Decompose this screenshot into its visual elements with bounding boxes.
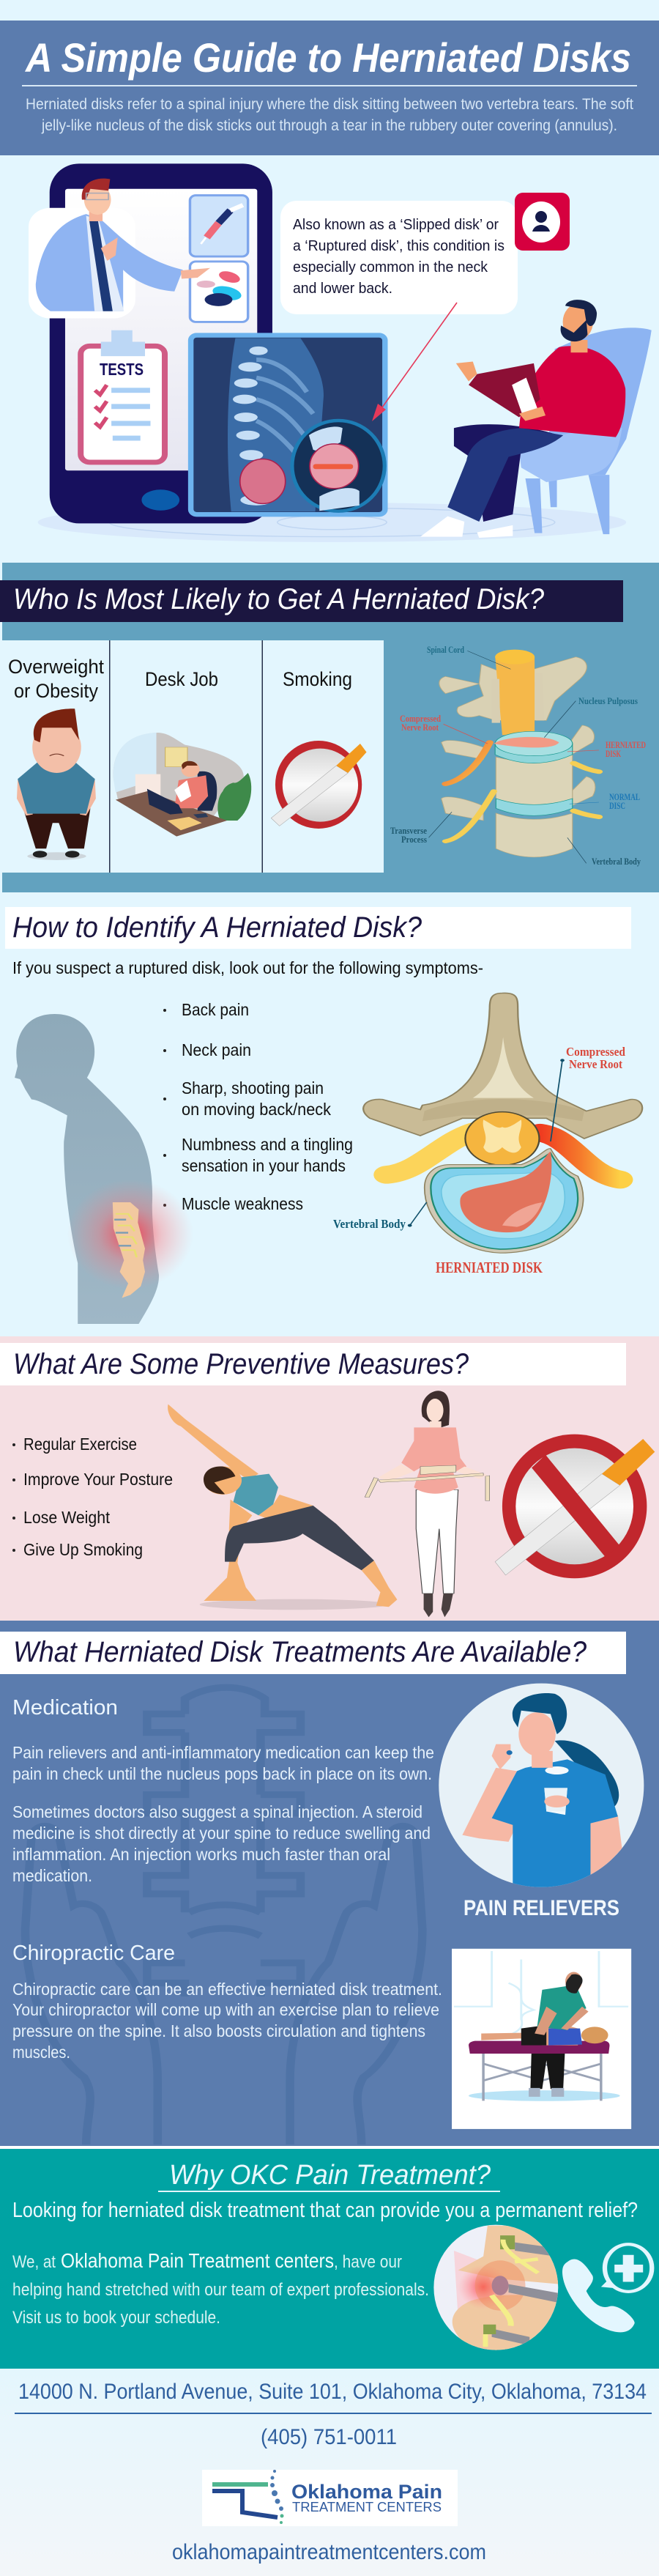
callout: especially common in the neck — [293, 259, 488, 275]
label: overweight: Overweight — [8, 656, 104, 678]
heading: Why OKC Pain Treatment? — [169, 2160, 491, 2191]
medication text: inflammation. An injection works much faster than oral — [12, 1845, 390, 1864]
diagram: herniated disk cross-section — [363, 993, 642, 1253]
chiropractic text: pressure on the spine. It also boosts circulation and tightens — [12, 2021, 425, 2040]
symptoms list — [163, 1000, 353, 1213]
anatomy labels: Compressed — [400, 713, 442, 724]
panel: risk factors — [0, 640, 384, 873]
intro text: jelly-like nucleus of the disk sticks out through a tear in the rubbery outer covering (annulus). — [41, 117, 617, 134]
anatomy labels: Vertebral Body — [592, 856, 641, 867]
trousers — [454, 424, 559, 522]
body text: , have our — [334, 2252, 402, 2272]
section: how to identify — [4, 892, 654, 1325]
measures list — [12, 1435, 173, 1559]
icon: phone with medical cross — [562, 2244, 652, 2332]
anatomy labels: Process — [401, 834, 427, 845]
leader lines — [551, 1060, 562, 1141]
doctor — [29, 179, 210, 319]
callout: a ‘Ruptured disk’, this condition is — [293, 238, 505, 254]
nucleus — [460, 1152, 551, 1232]
anatomy labels — [390, 644, 646, 867]
measures list: Lose Weight — [23, 1508, 111, 1527]
symptoms list: Numbness and a tingling — [182, 1135, 353, 1154]
tests label: TESTS — [100, 360, 144, 379]
header band — [0, 21, 659, 155]
watermark: spine and hands — [25, 1687, 422, 2144]
disk labels: Nerve Root — [569, 1057, 622, 1071]
label: overweight: or Obesity — [14, 680, 98, 702]
heading: What Are Some Preventive Measures? — [13, 1348, 469, 1380]
torso — [519, 346, 625, 437]
medication text: Sometimes doctors also suggest a spinal injection. A steroid — [12, 1802, 422, 1821]
nerve roots — [387, 1131, 475, 1174]
label: desk job: Desk Job — [145, 668, 218, 690]
vertebral bodies — [496, 755, 573, 807]
disk labels: Vertebral Body — [333, 1217, 406, 1231]
leader lines — [428, 651, 599, 863]
disk labels — [333, 1045, 625, 1276]
logo: Oklahoma Pain — [291, 2481, 442, 2503]
callout: Also known as a ‘Slipped disk’ or — [293, 217, 499, 233]
section 5 illustrations — [439, 1684, 644, 2129]
medication text: pain in check until the nucleus pops back in place on its own. — [12, 1764, 432, 1783]
body text: helping hand stretched with our team of expert professionals. — [12, 2280, 429, 2300]
icon: woman measuring waist — [365, 1391, 490, 1617]
section 6 illustrations — [433, 2225, 652, 2351]
herniated and normal discs — [495, 744, 573, 763]
anatomy labels: Transverse — [390, 825, 427, 836]
logo — [202, 2470, 458, 2526]
symptoms list: sensation in your hands — [182, 1156, 346, 1175]
intro text — [26, 96, 633, 134]
chiropractic text: Chiropractic care can be an effective herniated disk treatment. — [12, 1980, 442, 1999]
disc — [425, 1149, 584, 1253]
anatomy labels: Spinal Cord — [427, 644, 465, 655]
vertebra — [363, 993, 642, 1139]
treatments content — [0, 1632, 626, 2062]
symptoms list: Muscle weakness — [182, 1194, 303, 1213]
pain relievers caption: PAIN RELIEVERS — [463, 1896, 619, 1920]
callout: and lower back. — [293, 281, 392, 297]
x-ray — [191, 336, 385, 514]
body text — [12, 2249, 429, 2328]
section: preventive measures — [0, 1336, 659, 1621]
heading: What Herniated Disk Treatments Are Available? — [13, 1636, 587, 1668]
measures list: Give Up Smoking — [23, 1540, 143, 1559]
silhouette with spine — [15, 1014, 193, 1324]
medication heading: Medication — [12, 1696, 118, 1720]
body text: Oklahoma Pain Treatment centers — [61, 2249, 334, 2272]
card: pills — [190, 262, 248, 322]
symptoms list: Sharp, shooting pain — [182, 1078, 324, 1098]
anatomy labels: DISK — [606, 748, 622, 759]
disk labels: Compressed — [566, 1045, 625, 1059]
nerve roots — [445, 742, 599, 841]
chair — [519, 327, 652, 534]
chiropractic heading: Chiropractic Care — [12, 1942, 175, 1965]
anatomy labels: NORMAL — [609, 791, 640, 802]
anatomy labels: Nerve Root — [401, 722, 439, 733]
page background — [0, 0, 659, 564]
icon: no smoking sign — [495, 1435, 655, 1578]
head — [570, 340, 587, 352]
section 4 illustrations — [168, 1391, 655, 1617]
anatomy labels: Nucleus Pulposus — [578, 695, 638, 706]
chiropractic text: Your chiropractor will come up with an exercise plan to relieve — [12, 2000, 439, 2019]
illustration: woman taking a pill — [439, 1684, 644, 1889]
medication text: medication. — [12, 1866, 92, 1885]
icon: yoga pose — [168, 1404, 397, 1610]
icon: person badge — [515, 193, 570, 251]
phone — [50, 163, 272, 523]
card: syringe — [190, 196, 248, 256]
body text: Visit us to book your schedule. — [12, 2308, 220, 2328]
chiropractic text: muscles. — [12, 2043, 70, 2062]
icon: desk job — [113, 733, 251, 837]
logo: TREATMENT CENTERS — [292, 2500, 442, 2514]
symptoms list: on moving back/neck — [182, 1100, 331, 1119]
chiropractic text — [12, 1980, 442, 2062]
arrow — [372, 303, 457, 421]
floor rug — [38, 503, 626, 542]
medication text: Pain relievers and anti-inflammatory medication can keep the — [12, 1743, 434, 1762]
footer — [0, 2369, 659, 2576]
intro line: If you suspect a ruptured disk, look out for the following symptoms- — [12, 958, 483, 977]
anatomy diagram: spine segment — [428, 650, 599, 863]
card: chiropractic illustration — [452, 1949, 631, 2129]
patient in armchair — [420, 300, 652, 538]
section 2 illustrations — [17, 650, 599, 863]
icon: no smoking ring — [271, 741, 367, 829]
heading: Who Is Most Likely to Get A Herniated Disk? — [13, 583, 545, 615]
spinal cord — [495, 656, 535, 735]
illustration: phone, doctor, x-ray and patient — [29, 163, 652, 542]
label: overweight — [8, 656, 104, 702]
symptoms list: Back pain — [182, 1000, 249, 1019]
clipboard: tests — [81, 330, 165, 462]
section 3 illustrations — [15, 993, 642, 1324]
measures list: Regular Exercise — [23, 1435, 137, 1454]
medication text — [12, 1743, 434, 1885]
heading — [5, 907, 631, 949]
handset — [512, 378, 538, 418]
body text: We, at — [12, 2252, 56, 2272]
label: smoking: Smoking — [283, 668, 352, 690]
heading: How to Identify A Herniated Disk? — [12, 911, 422, 944]
section: treatments — [0, 1621, 659, 2146]
anatomy labels: DISC — [609, 800, 625, 811]
disk labels: HERNIATED DISK — [436, 1259, 543, 1276]
medication text: medicine is shot directly at your spine to reduce swelling and — [12, 1824, 431, 1843]
heading — [0, 1343, 626, 1385]
section: why OKC — [0, 2146, 659, 2369]
phone number: (405) 751-0011 — [261, 2425, 397, 2449]
icon: overweight man — [17, 708, 96, 860]
spinal cord — [465, 1112, 539, 1165]
section: who is most likely — [0, 563, 659, 892]
callout — [280, 201, 518, 314]
transverse processes — [439, 657, 595, 821]
measures list: Improve Your Posture — [23, 1470, 173, 1489]
website: oklahomapaintreatmentcenters.com — [172, 2540, 486, 2564]
illustration: spine close-up — [433, 2225, 563, 2351]
symptoms list: Neck pain — [182, 1040, 251, 1059]
